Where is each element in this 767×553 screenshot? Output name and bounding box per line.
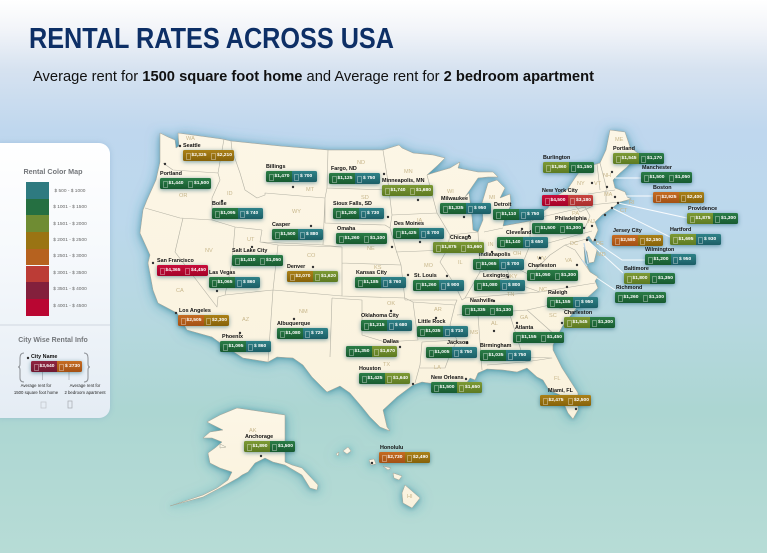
city: Portland OR: Portland [160, 171, 182, 177]
city: New Orleans: New Orleans [431, 375, 464, 381]
note: home rent: Average rent for [21, 383, 51, 388]
city: Albuquerque: Albuquerque [277, 321, 310, 327]
city: Lexington: $1,080 [482, 283, 497, 288]
title: RENTAL RATES ACROSS USA [29, 23, 394, 55]
city: Salt Lake City: $1,050 [266, 258, 281, 263]
city: Denver: $2,070 [296, 274, 310, 279]
city: Manchester: Manchester [642, 165, 672, 171]
state abbreviations: ND [357, 160, 365, 166]
city markers [152, 145, 619, 464]
city: Phoenix [217, 334, 274, 356]
city: Salt Lake City [229, 248, 286, 270]
state abbreviations: PA [572, 211, 579, 217]
city: Dallas [343, 339, 400, 361]
city: Minneapolis: Minneapolis, MN [382, 178, 425, 184]
city: Portland ME: $1,545 [622, 156, 636, 161]
city: Jersey City: $2,580 [620, 238, 635, 243]
city: Burlington: $1,860 [552, 165, 566, 170]
city: Denver [284, 264, 341, 286]
city: Albuquerque: $1,080 [286, 331, 300, 336]
city: Omaha: $1,260 [344, 236, 359, 241]
city: Houston: $1,640 [393, 376, 408, 381]
city: Birmingham [477, 343, 534, 365]
state abbreviations: MO [424, 263, 434, 269]
city: Providence [684, 206, 741, 228]
state abbreviations: KS [374, 265, 382, 271]
land masses [140, 130, 639, 508]
city: Seattle: $2,325 [192, 153, 206, 158]
city: Charleston SC: $1,300 [598, 320, 613, 325]
city: Jackson: Jackson [447, 340, 469, 346]
city: Miami: $2,500 [574, 398, 589, 403]
city: St. Louis: $1,260 [422, 283, 436, 288]
city: Hartford: $ 930 [704, 237, 716, 242]
city: Providence: Providence [688, 206, 717, 212]
state abbreviations: IN [488, 242, 494, 248]
city: Nashville: $1,335 [470, 308, 485, 313]
city: Raleigh: Raleigh [548, 290, 567, 296]
city: Wilmington: $1,200 [654, 257, 668, 262]
city: Charleston WV [527, 262, 578, 281]
city: Hartford: $1,695 [678, 237, 693, 242]
city: Chicago: Chicago [450, 235, 471, 241]
key diagram [18, 352, 90, 408]
state abbreviations: ME [615, 137, 624, 143]
city: Birmingham: $1,035 [488, 353, 503, 358]
state abbreviations: HI [407, 494, 413, 500]
state abbreviations: KY [510, 274, 518, 280]
city: Portland ME [613, 145, 664, 164]
city: Jackson [423, 340, 480, 362]
city: Boise: $1,095 [220, 211, 235, 216]
city: Los Angeles: $2,505 [186, 318, 201, 323]
city: Sioux Falls: $ 730 [367, 211, 379, 216]
city: Little Rock [414, 319, 471, 341]
city: Philadelphia: $1,500 [540, 226, 555, 231]
city: New York City: $3,180 [576, 198, 591, 203]
state abbreviations: SC [549, 313, 557, 319]
sample badge: City Name [31, 354, 57, 360]
state abbreviations: DE [596, 241, 604, 247]
city: Charleston SC: $1,545 [572, 320, 587, 325]
city: New York City [542, 187, 593, 206]
state abbreviations: AZ [242, 317, 250, 323]
city: Seattle: $2,210 [217, 153, 232, 158]
state abbreviations: NV [205, 248, 213, 254]
city: Dallas: $1,350 [354, 349, 369, 354]
city: Baltimore: $1,800 [632, 276, 647, 281]
city: Billings: Billings [266, 164, 285, 170]
city: Little Rock: Little Rock [418, 319, 446, 325]
city: Sioux Falls [333, 200, 384, 219]
city: Chicago [433, 234, 484, 253]
city: Chicago: $1,875 [442, 245, 456, 250]
state abbreviations: SD [361, 195, 369, 201]
city: Raleigh: $ 950 [581, 300, 593, 305]
city: Raleigh [544, 290, 601, 312]
city: Milwaukee: $1,335 [448, 206, 463, 211]
city: Casper: $1,500 [280, 232, 295, 237]
city: San Francisco: San Francisco [157, 258, 194, 264]
city: Oklahoma City: Oklahoma City [361, 313, 399, 319]
state abbreviations [176, 136, 635, 500]
city: New York City: New York City [542, 188, 578, 194]
color scale bar: $ 1001 - $ 1500 [53, 205, 87, 210]
state abbreviations: WV [537, 256, 546, 262]
note: apartment rent: 2 bedroom apartment [64, 390, 106, 394]
city: New Orleans: $1,650 [465, 385, 480, 390]
sample badge: $3,640 [40, 364, 54, 369]
city: Nashville: $1,130 [496, 308, 511, 313]
state abbreviations: AR [434, 307, 442, 313]
city: Las Vegas [206, 270, 263, 292]
city: Denver: $1,620 [321, 274, 336, 279]
state abbreviations: NY [577, 181, 585, 187]
city: Cleveland: Cleveland [506, 230, 531, 236]
city: Honolulu: $2,490 [413, 455, 428, 460]
state abbreviations: RI [629, 200, 635, 206]
state abbreviations: WY [292, 209, 301, 215]
city: Los Angeles: $2,300 [212, 318, 227, 323]
city: Portland ME: $1,170 [647, 156, 662, 161]
city: Fargo: Fargo, ND [331, 166, 357, 172]
city: Casper: $ 880 [306, 232, 318, 237]
city: Charleston WV: Charleston [528, 263, 556, 269]
state abbreviations: WI [447, 189, 454, 195]
city: New Orleans [428, 375, 485, 397]
city: Fargo [329, 165, 380, 184]
city: Albuquerque: $ 720 [311, 331, 323, 336]
state abbreviations: NJ [588, 219, 595, 225]
city: New York City: $4,500 [550, 198, 565, 203]
state abbreviations: MT [306, 187, 315, 193]
city: Cleveland: $1,140 [506, 240, 520, 245]
city: Atlanta [510, 325, 567, 347]
city: Los Angeles: Los Angeles [179, 308, 211, 314]
city: Lexington: $ 800 [508, 283, 520, 288]
panel: city wise rental info [14, 336, 106, 408]
city: Chicago: $1,660 [467, 245, 482, 250]
city: Phoenix: Phoenix [222, 334, 243, 340]
city: Miami: Miami, FL [548, 388, 573, 394]
city: Philadelphia: Philadelphia [555, 216, 587, 222]
city: Miami: $2,475 [548, 398, 563, 403]
state abbreviations: AL [491, 321, 498, 327]
state abbreviations: IA [417, 218, 423, 224]
city: Billings: $ 700 [300, 174, 312, 179]
city: Detroit: Detroit [494, 202, 511, 208]
city: Anchorage: Anchorage [245, 434, 273, 440]
city: Anchorage: $1,500 [278, 444, 293, 449]
state abbreviations: TX [383, 362, 390, 368]
city: Albuquerque [274, 321, 331, 343]
city: Detroit: $1,110 [502, 212, 516, 217]
state borders [145, 139, 620, 383]
note: home rent [14, 383, 58, 395]
city: Boston: Boston [653, 185, 672, 191]
Chesapeake Bay [582, 243, 588, 266]
city: Milwaukee: Milwaukee [441, 196, 468, 202]
state abbreviations: MI [489, 195, 496, 201]
state abbreviations: WA [186, 136, 195, 142]
city: Raleigh: $1,155 [556, 300, 570, 305]
city: Boise: $ 740 [246, 211, 258, 216]
city: Little Rock: $1,035 [426, 329, 440, 334]
city: Portland OR [157, 171, 214, 193]
city: Indianapolis: $ 700 [507, 262, 519, 267]
city: Richmond [612, 285, 669, 307]
state abbreviations: VA [565, 258, 572, 264]
state abbreviations: UT [247, 237, 255, 243]
city: Jersey City: $2,150 [646, 238, 661, 243]
city: Lexington [474, 272, 525, 291]
city: Fargo: $1,125 [338, 176, 352, 181]
state abbreviations: OR [179, 193, 187, 199]
state abbreviations: CO [307, 253, 316, 259]
city: Richmond: $1,260 [624, 295, 638, 300]
city: Fargo: $ 750 [363, 176, 375, 181]
city: Des Moines: $1,425 [402, 231, 416, 236]
city: Baltimore: Baltimore [624, 266, 649, 272]
city: Omaha [336, 225, 387, 244]
city: Detroit [493, 201, 544, 220]
city: Phoenix: $1,095 [228, 344, 243, 349]
city: Honolulu: Honolulu [380, 445, 403, 451]
state abbreviations: VT [594, 181, 602, 187]
city: Boston [650, 185, 707, 207]
city: Des Moines [393, 220, 444, 239]
city: Manchester: $1,500 [650, 175, 664, 180]
state abbreviations: OK [387, 301, 395, 307]
state abbreviations: MS [470, 330, 479, 336]
state abbreviations: TN [507, 292, 514, 298]
city: Detroit: $ 750 [527, 212, 539, 217]
state abbreviations: IL [458, 260, 463, 266]
state abbreviations: AK [249, 428, 257, 434]
city: Los Angeles [175, 308, 232, 330]
city: New Orleans: $1,500 [440, 385, 454, 390]
city: Kansas City: Kansas City [356, 270, 387, 276]
city: Indianapolis: $1,065 [482, 262, 496, 267]
color scale bar [26, 182, 87, 316]
state abbreviations: OH [513, 251, 521, 257]
city: Boston: $2,925 [662, 195, 676, 200]
city: Kansas City: $1,185 [364, 280, 378, 285]
city: Miami [537, 388, 594, 410]
heading: city wise rental info: City Wise Rental Info [18, 337, 88, 344]
note: home rent: 1500 square foot home [14, 390, 58, 394]
city: Casper: Casper [272, 222, 290, 228]
city: Minneapolis [382, 177, 433, 196]
city: Birmingham: Birmingham [480, 343, 511, 349]
city: Milwaukee [440, 195, 491, 214]
city: Atlanta: Atlanta [515, 325, 533, 331]
city: Houston: Houston [359, 366, 381, 372]
city: Burlington [543, 154, 594, 173]
city: Minneapolis: $1,680 [416, 188, 431, 193]
city: Charleston SC [561, 310, 618, 332]
city: San Francisco: $4,450 [191, 268, 206, 273]
city: Sioux Falls: $1,200 [342, 211, 356, 216]
state abbreviations: LA [434, 365, 441, 371]
city: Burlington: $1,150 [577, 165, 592, 170]
city: Jersey City: Jersey City [613, 228, 642, 234]
city: Billings [263, 164, 320, 186]
state abbreviations: NM [299, 309, 308, 315]
color scale bar: $ 3501 - $ 4000 [53, 287, 87, 292]
city: Wilmington: $ 950 [679, 257, 691, 262]
city: Philadelphia: $1,300 [566, 226, 581, 231]
city: Boise [209, 201, 266, 223]
city: Dallas: $1,670 [380, 349, 395, 354]
state abbreviations: ID [227, 191, 233, 197]
city: Charleston WV: $1,300 [561, 273, 576, 278]
city: Des Moines: $ 700 [427, 231, 439, 236]
city: Boston: $2,400 [687, 195, 702, 200]
city: Kansas City: $ 760 [389, 280, 401, 285]
city: Cleveland: $ 650 [531, 240, 543, 245]
city: Las Vegas: $ 860 [243, 280, 255, 285]
color scale bar: $ 2501 - $ 3000 [53, 254, 87, 259]
color scale bar: $ 1501 - $ 2000 [53, 222, 87, 227]
city: Billings: $1,470 [274, 174, 289, 179]
heading: rental color map: Rental Color Map [23, 167, 83, 176]
city: Little Rock: $ 710 [451, 329, 463, 334]
city: Casper [269, 222, 326, 244]
sample badge: $ 2730 [65, 364, 80, 369]
city: Oklahoma City [358, 313, 415, 335]
city: St. Louis: St. Louis [414, 273, 437, 279]
city: St. Louis: $ 900 [447, 283, 459, 288]
city: Oklahoma City: $ 680 [395, 323, 407, 328]
state abbreviations: MN [404, 169, 413, 175]
city: Birmingham: $ 750 [514, 353, 526, 358]
city: Anchorage: $1,890 [252, 444, 267, 449]
city: Boise: Boise [212, 201, 227, 207]
state abbreviations: CA [176, 288, 184, 294]
state abbreviations: GA [520, 315, 528, 321]
city: Denver: Denver [287, 264, 305, 270]
color scale bar: $ 500 - $ 1000 [55, 189, 85, 194]
color scale bar: $ 4001 - $ 4500 [53, 304, 87, 309]
color scale bar: $ 3001 - $ 3500 [53, 271, 87, 276]
panel: legend [0, 143, 110, 418]
city: Honolulu [379, 444, 430, 463]
city: Minneapolis: $1,740 [390, 188, 405, 193]
city: Charleston WV: $1,050 [536, 273, 550, 278]
city: Seattle: Seattle [183, 143, 201, 149]
city: Nashville: Nashville [470, 298, 494, 304]
state abbreviations: NH [603, 173, 611, 179]
sample badge [28, 354, 85, 376]
city: Kansas City [355, 269, 406, 288]
city: Phoenix: $ 860 [254, 344, 266, 349]
city: Anchorage [244, 433, 295, 452]
city: San Francisco: $4,365 [166, 268, 180, 273]
city: Indianapolis: Indianapolis [479, 252, 510, 258]
city: Burlington: Burlington [543, 155, 570, 161]
city: Las Vegas: $1,065 [218, 280, 232, 285]
city: Atlanta: $1,450 [547, 335, 562, 340]
city: Richmond: Richmond [616, 285, 642, 291]
city: Cleveland [497, 229, 548, 248]
city: Dallas: Dallas [383, 339, 399, 345]
city: Jackson: $ 750 [460, 350, 472, 355]
city: Baltimore: $1,350 [658, 276, 673, 281]
city: Portland OR: $1,440 [168, 181, 183, 186]
city: Houston [356, 366, 413, 388]
city: Omaha: $1,100 [370, 236, 385, 241]
note: apartment rent: Average rent for [70, 383, 100, 388]
city: Indianapolis [473, 251, 524, 270]
city: St. Louis [413, 272, 464, 291]
city: Portland OR: $1,500 [194, 181, 209, 186]
state abbreviations: MA [604, 192, 613, 198]
city: Providence: $1,875 [696, 216, 710, 221]
city: Seattle [180, 143, 237, 165]
note: apartment rent [64, 383, 106, 395]
color scale bar: $ 2001 - $ 2500 [53, 238, 87, 243]
city: Jackson: $1,005 [434, 350, 449, 355]
city: Hartford [667, 227, 724, 249]
city: Sioux Falls: Sioux Falls, SD [333, 201, 372, 207]
city: Providence: $1,300 [721, 216, 736, 221]
city: Oklahoma City: $1,215 [370, 323, 384, 328]
panel: rental color map [0, 167, 110, 326]
city: Baltimore [621, 266, 678, 288]
city: Nashville [459, 298, 516, 320]
city: Portland ME: Portland [613, 146, 635, 152]
city: Wilmington [642, 247, 699, 269]
callout lines [587, 178, 687, 290]
city: Des Moines: Des Moines [394, 221, 424, 227]
state abbreviations: FL [554, 376, 561, 382]
city: Atlanta: $1,155 [522, 335, 536, 340]
subtitle: Average rent for 1500 square foot home and Average rent for 2 bedroom apartment [33, 69, 594, 85]
city: Richmond: $1,100 [649, 295, 664, 300]
state abbreviations: NE [367, 246, 375, 252]
city: San Francisco [154, 258, 211, 280]
city: Jersey City [609, 228, 666, 250]
city: Houston: $1,425 [368, 376, 382, 381]
city: Milwaukee: $ 950 [474, 206, 486, 211]
city: Wilmington: Wilmington [645, 247, 674, 253]
state abbreviations: MD [597, 252, 606, 258]
state abbreviations: NC [539, 287, 547, 293]
city: Hartford: Hartford [670, 227, 691, 233]
city: Lexington: Lexington [483, 273, 509, 279]
city: Omaha: Omaha [337, 226, 355, 232]
city: Manchester: $1,050 [675, 175, 690, 180]
city: Charleston SC: Charleston [564, 310, 592, 316]
state abbreviations: DC [570, 241, 578, 247]
city: Philadelphia [532, 215, 583, 234]
city: Honolulu: $2,730 [388, 455, 402, 460]
city: Manchester [641, 164, 692, 183]
city: Las Vegas: Las Vegas [209, 270, 235, 276]
city: Salt Lake City: Salt Lake City [232, 248, 267, 254]
state abbreviations: CT [620, 208, 628, 214]
city: Salt Lake City: $1,410 [240, 258, 255, 263]
